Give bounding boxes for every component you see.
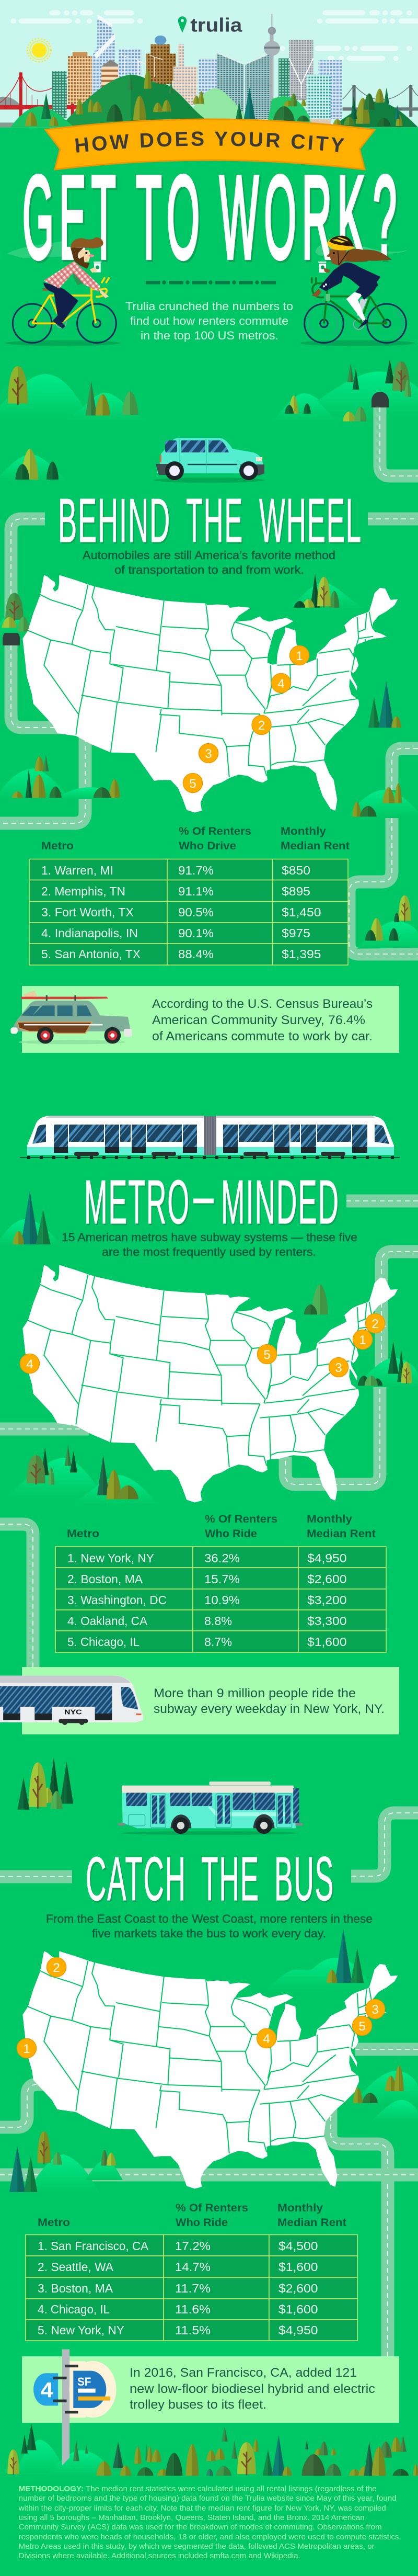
- table rows: 5. New York, NY: [38, 2323, 124, 2337]
- icon: NYC subway car: [0, 1676, 143, 1725]
- table header: Who Drive: [179, 840, 236, 852]
- callout text: subway every weekday in New York, NY.: [154, 1702, 385, 1716]
- callout text: American Community Survey, 76.4%: [152, 1013, 365, 1027]
- table header: [67, 1513, 376, 1540]
- table rows: 5. Chicago, IL: [67, 1635, 140, 1649]
- table rows: $3,300: [307, 1614, 347, 1628]
- subheading: section 1: [83, 549, 335, 576]
- heading: behind the wheel: THE: [186, 486, 243, 555]
- table rows: 11.6%: [175, 2302, 211, 2316]
- table rows: $4,950: [278, 2323, 318, 2337]
- methodology note: Metro Areas used in this study, by which we segmented the data, followed ACS Metropolitan areas, or: [19, 2543, 375, 2551]
- intro text: [125, 300, 293, 342]
- callout text: of Americans commute to work by car.: [152, 1029, 373, 1043]
- table header: Metro: [41, 840, 74, 852]
- table rows: $975: [282, 926, 310, 940]
- table rows: $2,600: [307, 1572, 347, 1586]
- table rows: 2. Boston, MA: [67, 1572, 143, 1586]
- table rows: 11.5%: [175, 2323, 211, 2337]
- map pins: section 3: 1: [23, 2042, 30, 2056]
- logo: trulia: trulia: [190, 14, 242, 36]
- buildings: [52, 14, 342, 125]
- table: bus riders: [26, 2202, 357, 2341]
- methodology note: Divisions where available. Additional sources included smfta.com and Wikipedia.: [19, 2552, 300, 2560]
- table rows: 1. Warren, MI: [41, 864, 113, 877]
- scenery below map 1: [0, 755, 418, 949]
- table rows: 14.7%: [175, 2260, 211, 2274]
- scenery around map 3: [9, 2066, 418, 2192]
- map: US renters who drive: [22, 575, 398, 812]
- scenery section 2: [0, 1191, 418, 1505]
- subheading: section 1: of transportation to and from work.: [114, 563, 304, 576]
- left tree at tunnel: [0, 593, 34, 633]
- map pins: section 1: 3: [205, 747, 212, 761]
- callout text: [152, 997, 373, 1043]
- trees: [8, 366, 28, 405]
- callout: NYC subway riders: [0, 1667, 399, 1734]
- table header: Metro: [67, 1528, 99, 1540]
- sky: [0, 0, 418, 127]
- table header: % Of Renters: [176, 2202, 248, 2214]
- table rows: $1,395: [282, 947, 321, 961]
- icon: bus stop sign: SF: [77, 2376, 91, 2388]
- callout: San Francisco trolley buses: [22, 2356, 399, 2423]
- pines right of map: [368, 681, 401, 728]
- table header: Monthly: [281, 825, 326, 837]
- table header: Monthly: [307, 1513, 352, 1525]
- table rows: 91.1%: [178, 884, 214, 898]
- banner: how does your city: HOW DOES YOUR CITY: [75, 131, 345, 153]
- table rows: $1,450: [282, 905, 321, 919]
- map pins: section 2: 4: [26, 1357, 33, 1371]
- subheading: section 2: 15 American metros have subway systems — these five: [62, 1231, 357, 1244]
- subheading: section 1: Automobiles are still America’s favorite method: [83, 549, 335, 562]
- right hill: [346, 783, 418, 817]
- table header: Median Rent: [281, 840, 350, 852]
- title: get to work: TO: [136, 151, 205, 283]
- subheading: section 3: From the East Coast to the West Coast, more renters in these: [46, 1912, 373, 1925]
- map pins: section 2: 1: [359, 1333, 366, 1347]
- roads: section 3: [0, 1813, 418, 2359]
- callout: census commute by car: [10, 986, 399, 1053]
- heading: catch the bus: THE: [201, 1844, 260, 1914]
- map pins: section 1: 5: [189, 777, 196, 791]
- lower right hill: [357, 895, 418, 949]
- map pins: section 1: 2: [258, 719, 265, 733]
- title: get to work: GET: [22, 151, 121, 283]
- tram: light rail: [20, 1116, 400, 1158]
- table rows: 1. New York, NY: [67, 1551, 154, 1565]
- table rows: 5. San Antonio, TX: [41, 947, 141, 961]
- subheading: section 2: [62, 1231, 357, 1258]
- map pins: section 1: [183, 645, 309, 793]
- table rows: 3. Washington, DC: [67, 1593, 167, 1607]
- table rows: 4. Chicago, IL: [38, 2302, 110, 2316]
- map pins: section 1: 4: [277, 677, 285, 691]
- table rows: $1,600: [278, 2260, 318, 2274]
- table rows: $4,500: [278, 2239, 318, 2253]
- methodology note: Community Survey (ACS) data was used for the breakdown of modes of commuting. Observations from: [19, 2523, 382, 2532]
- wind swoosh right: [315, 243, 408, 256]
- icon: bus stop sign: [33, 2350, 116, 2466]
- table header: Median Rent: [307, 1528, 376, 1540]
- subheading: section 3: [46, 1912, 373, 1940]
- hills: [10, 75, 418, 127]
- table cells: [29, 859, 348, 965]
- bushes right of midwest: [304, 1285, 328, 1314]
- map pins: section 2: 5: [263, 1348, 271, 1362]
- table rows: 11.7%: [175, 2282, 211, 2295]
- table rows: 90.1%: [178, 926, 214, 940]
- table rows: [38, 2239, 318, 2337]
- table rows: $1,600: [278, 2302, 318, 2316]
- map pins: section 3: [17, 1957, 385, 2058]
- panel: hero skyline: [0, 0, 418, 127]
- icon: NYC subway car: NYC: [64, 1708, 82, 1716]
- methodology note: using all 5 boroughs – Manhattan, Brooklyn, Queens, Staten Island, and the Bronx. 2014 American: [19, 2514, 365, 2522]
- table rows: 88.4%: [178, 947, 214, 961]
- table rows: [67, 1551, 347, 1649]
- skyline trees: [25, 70, 402, 126]
- table header: [41, 825, 350, 852]
- dotted divider: [146, 280, 276, 285]
- table cells: [55, 1547, 386, 1652]
- callout text: trolley buses to its fleet.: [130, 2398, 266, 2412]
- heading: metro-minded: –: [193, 1161, 215, 1230]
- map: US subway riders: [22, 1265, 398, 1502]
- table rows: 15.7%: [204, 1572, 240, 1586]
- subheading: section 3: five markets take the bus to work every day.: [92, 1927, 326, 1940]
- table: renters who drive: [29, 825, 350, 965]
- methodology note: number of bedrooms and the type of housing) data found on the Trulia website since May of this year, found: [19, 2494, 397, 2503]
- right hills: [353, 2066, 418, 2122]
- table header: % Of Renters: [205, 1513, 277, 1525]
- trees centre: [206, 2426, 292, 2476]
- table rows: 4. Indianapolis, IN: [41, 926, 138, 940]
- golden gate bridge: [0, 72, 89, 127]
- bay bridge: [343, 85, 418, 117]
- right hill and pines: [356, 1342, 418, 1387]
- tunnels: [3, 392, 389, 645]
- intro text: Trulia crunched the numbers to: [125, 300, 293, 313]
- table rows: $850: [282, 864, 310, 877]
- left pines: [0, 1191, 60, 1246]
- callout text: new low-floor biodiesel hybrid and electric: [130, 2382, 375, 2396]
- table rows: 2. Seattle, WA: [38, 2260, 114, 2274]
- cyclist: woman on green bike: [299, 236, 414, 346]
- callout text: More than 9 million people ride the: [154, 1686, 356, 1700]
- map: US bus riders: [22, 1951, 398, 2188]
- bus: teal transit bus: [118, 1781, 303, 1835]
- heading: metro-minded: METRO: [84, 1167, 190, 1237]
- map pins: section 3: 3: [371, 2003, 379, 2017]
- table rows: 17.2%: [175, 2239, 211, 2253]
- section 1 scenery: [0, 359, 418, 481]
- text: BUS: [274, 1844, 334, 1914]
- callout text: [130, 2366, 375, 2412]
- icon: woody wagon with surfboard: [10, 991, 132, 1044]
- table rows: $3,200: [307, 1593, 347, 1607]
- table rows: 1. San Francisco, CA: [38, 2239, 149, 2253]
- table rows: 3. Fort Worth, TX: [41, 905, 134, 919]
- trees right: [302, 2435, 418, 2476]
- methodology note: respondents who were heads of households, 18 or older, and also employed were used to compute statistics.: [19, 2533, 401, 2541]
- roads: section 1: [0, 407, 418, 954]
- table rows: 8.8%: [204, 1614, 232, 1628]
- table rows: 8.7%: [204, 1635, 232, 1649]
- table rows: $895: [282, 884, 310, 898]
- table header: [38, 2202, 346, 2229]
- roads: section 2: [0, 1201, 418, 1669]
- table rows: 91.7%: [178, 864, 214, 877]
- trees left: [7, 2423, 199, 2476]
- heading: catch the bus: CATCH: [86, 1844, 187, 1914]
- table header: % Of Renters: [179, 825, 251, 837]
- table rows: 3. Boston, MA: [38, 2282, 113, 2295]
- table rows: 4. Oakland, CA: [67, 1614, 148, 1628]
- left hills: [9, 2131, 123, 2192]
- table header: Who Ride: [176, 2217, 228, 2229]
- table rows: 90.5%: [178, 905, 214, 919]
- clouds: [10, 10, 418, 61]
- icon: sun: [28, 39, 51, 62]
- cyclist: man on yellow bike: [5, 237, 120, 346]
- table rows: 2. Memphis, TN: [41, 884, 125, 898]
- heading: behind the wheel: BEHIND: [58, 486, 171, 555]
- callout text: [154, 1686, 385, 1716]
- methodology note: within the city-proper limits for each city. Note that the median rent figure for New York, NY, was compiled: [18, 2504, 386, 2513]
- table rows: [41, 864, 321, 961]
- table header: Monthly: [277, 2202, 323, 2214]
- bottom forest: [7, 2423, 418, 2476]
- left hills: [0, 755, 125, 799]
- hills top left: [0, 371, 418, 481]
- table: subway riders: [55, 1513, 386, 1652]
- map pins: section 3: 4: [263, 2032, 270, 2046]
- map pins: section 2: 2: [371, 1317, 379, 1331]
- scenery around map 1: [0, 574, 401, 728]
- hill right of title: [288, 582, 365, 608]
- map pins: section 2: [20, 1314, 385, 1377]
- table header: Median Rent: [277, 2217, 346, 2229]
- table rows: 36.2%: [204, 1551, 240, 1565]
- car: teal hatchback: [154, 438, 264, 483]
- banner: how does your city: [44, 118, 376, 171]
- trees cluster: [294, 574, 339, 608]
- table header: Who Ride: [205, 1528, 257, 1540]
- map pins: section 2: 3: [335, 1361, 342, 1375]
- intro text: find out how renters commute: [130, 314, 288, 327]
- table cells: [26, 2234, 357, 2341]
- callout text: In 2016, San Francisco, CA, added 121: [130, 2366, 357, 2380]
- hills: [14, 2440, 117, 2476]
- table rows: $2,600: [278, 2282, 318, 2295]
- table header: Metro: [38, 2217, 70, 2229]
- lower left hills: [8, 1445, 157, 1505]
- intro text: in the top 100 US metros.: [141, 329, 278, 342]
- callout text: According to the U.S. Census Bureau’s: [152, 997, 373, 1011]
- methodology note: METHODOLOGY: The median rent statistics were calculated using all rental listings (regardless of the: [19, 2485, 377, 2493]
- table rows: $1,600: [307, 1635, 347, 1649]
- map pins: section 3: 5: [358, 2019, 366, 2034]
- hill and pines near map 3: [266, 1929, 373, 1990]
- map pins: section 1: 1: [296, 649, 303, 663]
- tree cluster above bus section: [17, 1757, 73, 1810]
- table rows: 10.9%: [204, 1593, 240, 1607]
- icon: bus stop sign: 4: [41, 2378, 54, 2402]
- table rows: $4,950: [307, 1551, 347, 1565]
- map pins: section 3: 2: [53, 1961, 60, 1975]
- wind swoosh left: [7, 241, 69, 258]
- subheading: section 2: are the most frequently used by renters.: [102, 1245, 316, 1258]
- methodology note: [18, 2485, 401, 2560]
